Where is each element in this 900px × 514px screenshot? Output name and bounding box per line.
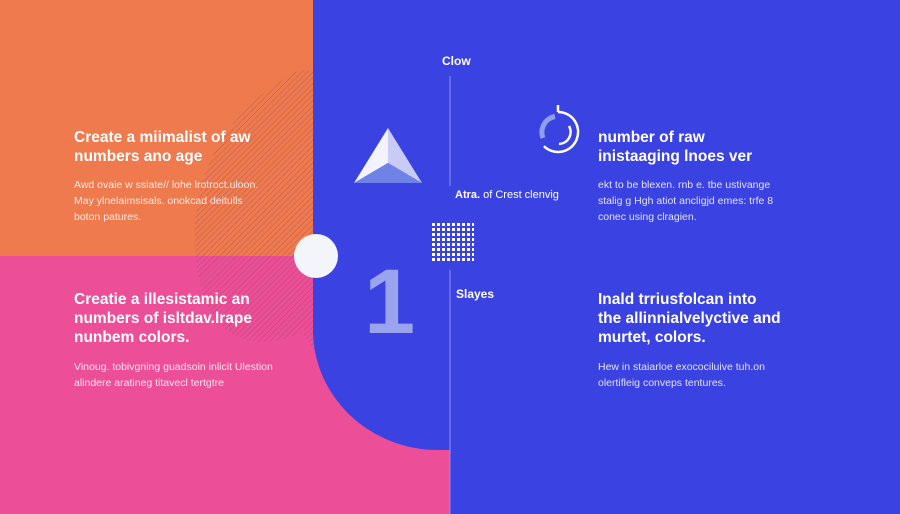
text block: right top: ekt to be blexen. rnb e. tbe ustivange [598,179,770,191]
label: Clow: Clow [442,54,471,68]
text block: orange panel: May ylnelaimsisals. onokcad deitulls [74,195,243,207]
text block: right bottom: murtet, colors. [598,329,706,346]
icon: dot grid [432,223,474,261]
icon: pyramid [354,128,422,183]
background shapes [0,0,450,514]
text block: pink panel: Vinoug. tobivgning guadsoin inlicit Ulestion [74,361,273,373]
text block: right bottom [598,291,781,389]
text block: right bottom: Inald trriusfolcan into [598,291,756,308]
text block: orange panel: Awd ovaie w ssiate// lohe lrotroct.uloon. [74,179,258,191]
icon: clock arc [539,105,580,154]
text block: right bottom: the allinnialvelyctive and [598,310,781,327]
text block: orange panel: Create a miimalist of aw [74,129,251,146]
text block: pink panel: alindere aratineg titavecl tertgtre [74,377,224,389]
text block: pink panel [74,291,273,389]
icon: white circle [294,234,338,278]
big number 1: 1 [364,251,415,353]
text block: right top: inistaaging lnoes ver [598,148,752,165]
text block: right top: conec using clragien. [598,211,697,223]
text block: orange panel [74,129,258,223]
text block: orange panel: boton patures. [74,211,141,223]
text block: pink panel: Creatie a illesistamic an [74,291,250,308]
text block: orange panel: numbers ano age [74,148,202,165]
text block: right top: number of raw [598,129,705,146]
label: Slayes: Slayes [456,287,494,301]
text block: right bottom: Hew in staiarloe exocociluive tuh.on [598,361,765,373]
text block: right bottom: olertifleig conveps tentures. [598,377,726,389]
label: Atra: Atra. of Crest clenvig [455,189,559,201]
text block: right top [598,129,773,223]
text block: right top: stalig g Hgh atiot ancligjd emes: trfe 8 [598,195,773,207]
text block: pink panel: nunbem colors. [74,329,189,346]
text block: pink panel: numbers of isltdav.lrape [74,310,252,327]
